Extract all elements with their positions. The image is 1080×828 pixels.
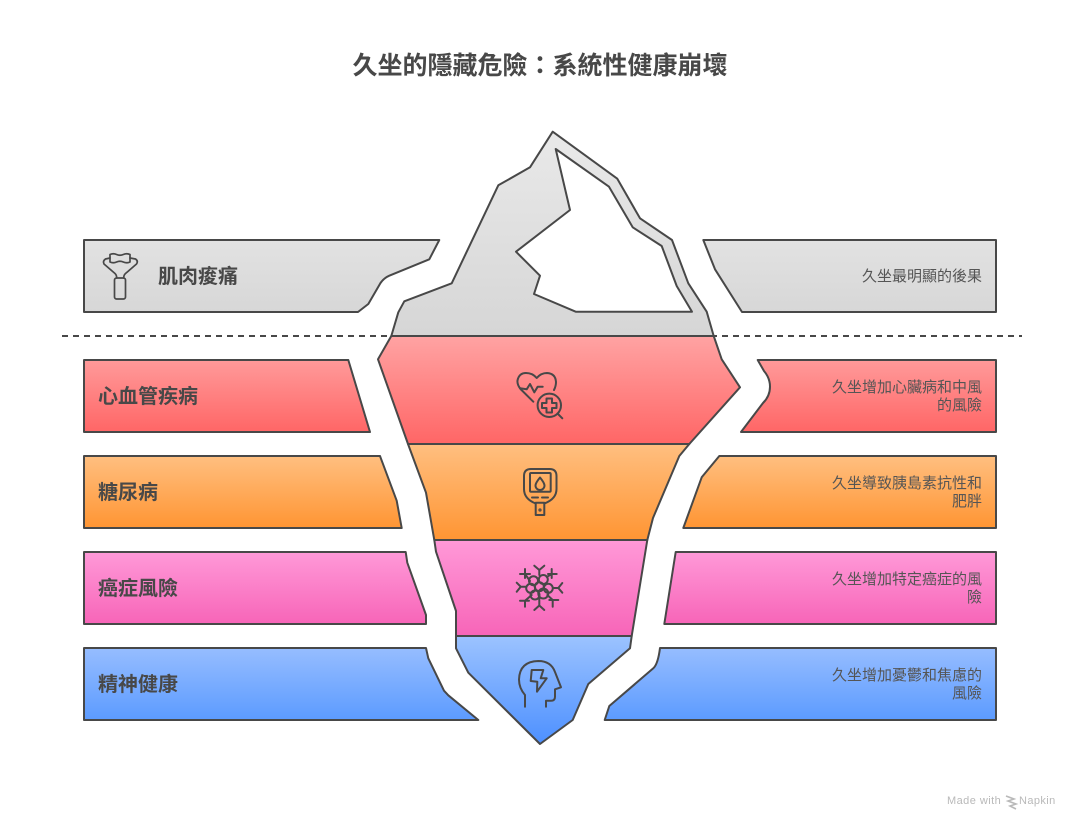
right panel: cancer description: 險	[967, 589, 982, 606]
icon: heart with magnifier	[517, 373, 562, 418]
label: muscle pain: 肌肉痠痛	[158, 264, 238, 288]
title: 久坐的隱藏危險：系統性健康崩壞	[352, 51, 728, 80]
waterline	[62, 335, 1022, 337]
iceberg layer: mental health	[456, 636, 632, 744]
right panel: diabetes description: 肥胖	[952, 493, 982, 510]
label: cardiovascular disease: 心血管疾病	[98, 384, 198, 408]
right panel: muscle pain description	[703, 240, 996, 312]
footer: Made with Napkin: Napkin	[1019, 795, 1056, 807]
right panel: mental health description: 風險	[952, 685, 982, 702]
left panel: cancer risk	[84, 552, 426, 624]
label: mental health: 精神健康	[98, 672, 178, 696]
left panel: mental health	[84, 648, 478, 720]
left panel: muscle pain	[84, 240, 439, 312]
iceberg tip: above water	[391, 132, 714, 336]
label: diabetes: 糖尿病	[98, 481, 158, 504]
right panel: mental health description	[605, 648, 996, 720]
label: cancer risk: 癌症風險	[98, 576, 178, 600]
iceberg layer: heart disease	[378, 336, 740, 444]
right panel: cancer description	[664, 552, 996, 624]
right panel: cardiovascular description	[741, 360, 996, 432]
icon: cancer cells	[517, 566, 562, 610]
text: muscle pain description: 久坐最明顯的後果	[862, 268, 982, 285]
iceberg layer: diabetes	[408, 444, 689, 540]
iceberg	[378, 132, 740, 744]
footer: Made with Napkin	[947, 795, 1056, 809]
left panel: diabetes	[84, 456, 402, 528]
left panel: cardiovascular disease	[84, 360, 370, 432]
iceberg layer: cancer	[434, 540, 647, 636]
text: cardiovascular description: 久坐增加心臟病和中風	[832, 379, 982, 396]
footer: Made with Napkin: Made with	[947, 795, 1001, 807]
right panel: diabetes description	[683, 456, 996, 528]
text: mental health description: 久坐增加憂鬱和焦慮的	[832, 667, 982, 684]
icon: Napkin logo	[1006, 796, 1016, 809]
icon: massage roller	[104, 254, 137, 299]
right panel: cardiovascular description: 的風險	[937, 397, 982, 414]
text: cancer description: 久坐增加特定癌症的風	[832, 571, 982, 588]
text: diabetes description: 久坐導致胰島素抗性和	[832, 475, 982, 492]
icon: head with lightning bolt	[519, 661, 561, 707]
icon: glucose meter	[524, 469, 556, 515]
